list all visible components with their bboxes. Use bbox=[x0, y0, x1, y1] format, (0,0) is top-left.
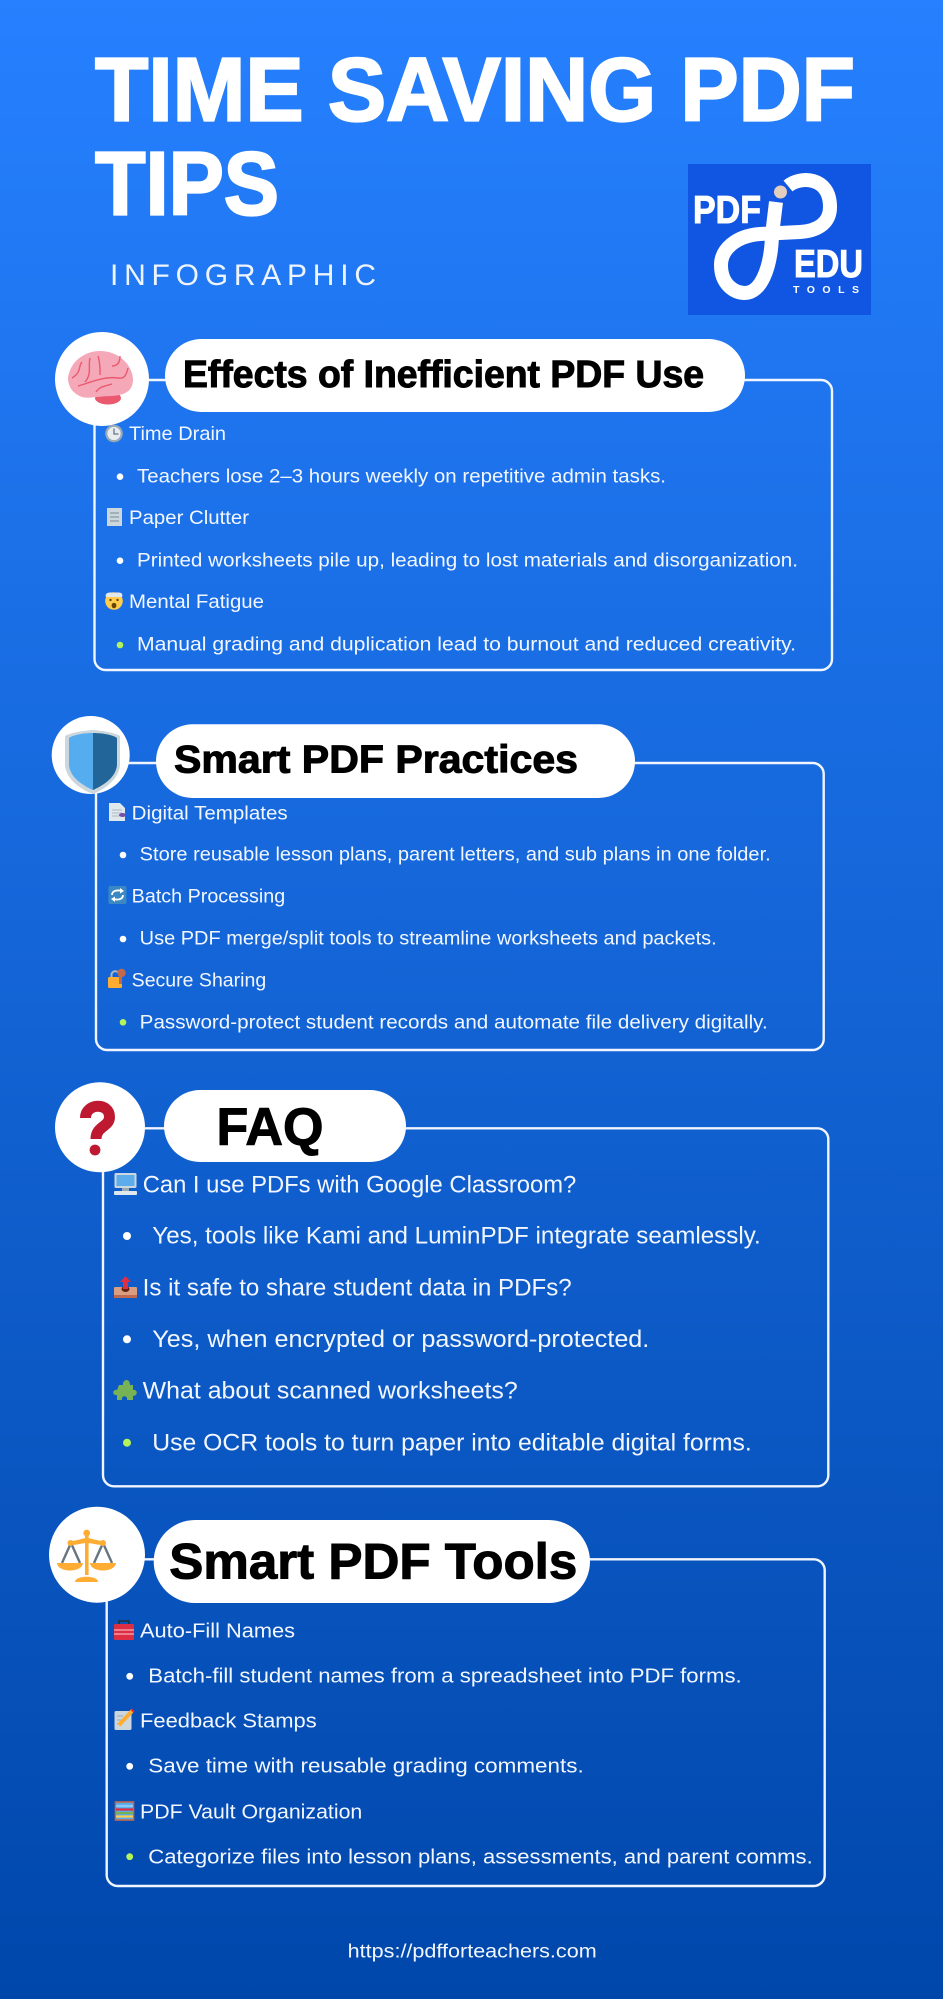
subtitle: INFOGRAPHIC bbox=[110, 259, 376, 292]
footer url: https://pdfforteachers.com bbox=[348, 1941, 597, 1962]
panel: Smart PDF Practices bbox=[52, 716, 824, 1050]
title bbox=[95, 40, 855, 234]
heading pill: FAQ bbox=[216, 1098, 324, 1157]
heading pill: Smart PDF Practices bbox=[174, 739, 578, 782]
item: PDF Vault Organization: PDF Vault Organization bbox=[140, 1800, 362, 1823]
bullet: categorize: Categorize files into lesson plans, assessments, and parent comms. bbox=[148, 1845, 813, 1868]
item: Time Drain: Time Drain bbox=[129, 423, 226, 445]
heading pill: Smart PDF Tools bbox=[169, 1533, 577, 1589]
item: Mental Fatigue: Mental Fatigue bbox=[129, 591, 264, 613]
bullet: worksheets: Printed worksheets pile up, leading to lost materials and disorganization. bbox=[137, 549, 798, 571]
icon: shield bbox=[52, 716, 130, 794]
title: TIPS bbox=[95, 134, 279, 234]
icon: question mark bbox=[55, 1082, 145, 1172]
logo: TOOLS bbox=[793, 284, 859, 296]
item: Google Classroom question: Can I use PDFs with Google Classroom? bbox=[143, 1171, 576, 1198]
panel: Effects of Inefficient PDF Use bbox=[55, 332, 832, 670]
panel border bbox=[107, 1559, 825, 1886]
bullet: reusable comments: Save time with reusable grading comments. bbox=[148, 1755, 584, 1778]
logo: EDU bbox=[794, 243, 863, 286]
bullet: batch-fill: Batch-fill student names from a spreadsheet into PDF forms. bbox=[148, 1664, 742, 1687]
panel: FAQ bbox=[55, 1082, 828, 1486]
bullet: OCR: Use OCR tools to turn paper into editable digital forms. bbox=[152, 1429, 752, 1456]
item: Digital Templates: Digital Templates bbox=[132, 802, 288, 824]
heading pill bbox=[164, 1090, 406, 1162]
icon: brain bbox=[55, 332, 149, 426]
logo bbox=[688, 164, 871, 315]
logo: PDF bbox=[693, 189, 761, 232]
item: Auto-Fill Names: Auto-Fill Names bbox=[140, 1619, 295, 1642]
heading pill bbox=[156, 724, 635, 798]
item: Secure Sharing: Secure Sharing bbox=[132, 969, 266, 991]
panel border bbox=[94, 380, 832, 670]
bullet: reusable: Store reusable lesson plans, parent letters, and sub plans in one folder. bbox=[140, 843, 771, 865]
icon: balance scale bbox=[49, 1507, 145, 1603]
panel: Smart PDF Tools bbox=[49, 1507, 825, 1886]
item: Batch Processing: Batch Processing bbox=[132, 885, 285, 907]
item: Paper Clutter: Paper Clutter bbox=[129, 507, 250, 529]
item: scanned worksheets question: What about scanned worksheets? bbox=[143, 1377, 518, 1404]
heading pill bbox=[165, 339, 745, 412]
bullet: Kami and LuminPDF: Yes, tools like Kami and LuminPDF integrate seamlessly. bbox=[152, 1222, 761, 1249]
item: Feedback Stamps: Feedback Stamps bbox=[140, 1709, 317, 1732]
item: student data question: Is it safe to share student data in PDFs? bbox=[143, 1274, 572, 1301]
title: TIME SAVING PDF bbox=[95, 40, 855, 140]
heading pill bbox=[154, 1520, 590, 1603]
heading pill: Effects of Inefficient PDF Use bbox=[183, 354, 704, 396]
bullet: encrypted: Yes, when encrypted or password-protected. bbox=[152, 1326, 649, 1353]
panel border bbox=[96, 763, 824, 1050]
bullet: admin time: Teachers lose 2–3 hours weekly on repetitive admin tasks. bbox=[137, 465, 666, 487]
bullet: merge split: Use PDF merge/split tools to streamline worksheets and packets. bbox=[140, 927, 717, 949]
bullet: grading: Manual grading and duplication lead to burnout and reduced creativity. bbox=[137, 633, 796, 655]
panel border bbox=[103, 1128, 828, 1486]
bullet: password: Password-protect student records and automate file delivery digitally. bbox=[140, 1011, 768, 1033]
